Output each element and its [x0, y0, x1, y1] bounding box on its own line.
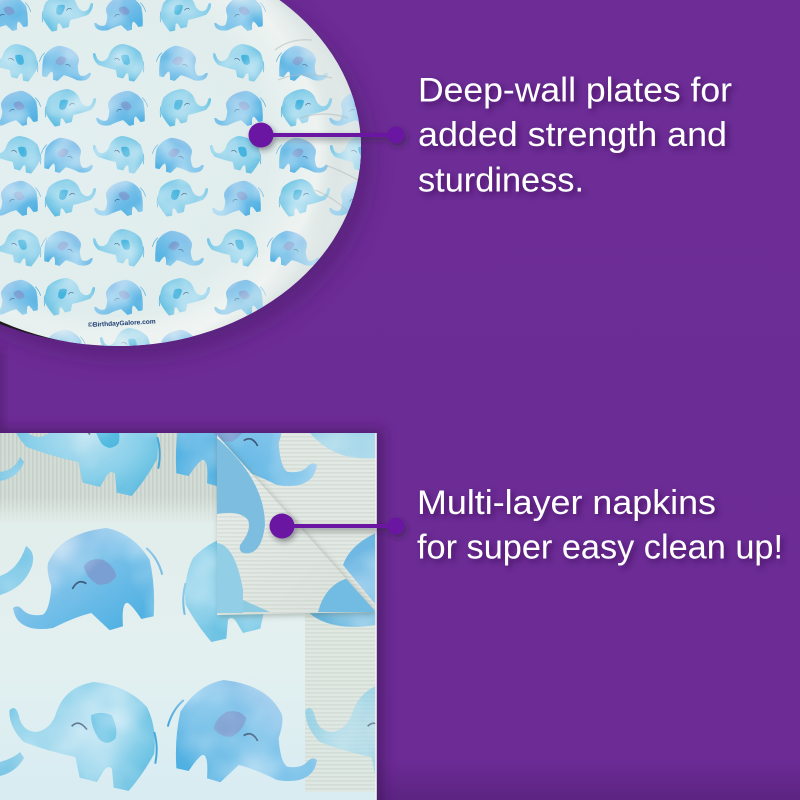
text block: plates — [418, 72, 732, 200]
text block: plates: Deep-wall plates for — [418, 72, 732, 110]
panel: paper plate — [0, 0, 381, 366]
top clipped elephant right — [176, 433, 317, 486]
bottom second elephant — [168, 680, 317, 782]
right napkin edge highlight — [375, 433, 377, 800]
left edge shadow — [0, 350, 4, 435]
plate surface — [0, 0, 361, 346]
top clipped elephant left — [16, 433, 161, 496]
text block: napkins: for super easy clean up! — [417, 528, 783, 566]
plate shadow — [0, 0, 370, 358]
trunk fragment one — [0, 457, 24, 481]
bottom left elephant — [9, 682, 157, 791]
copyright text: ©BirthdayGalore.com — [88, 317, 156, 329]
small dot — [388, 518, 404, 534]
small dot — [388, 126, 404, 144]
napkin ribbed bands — [0, 433, 376, 792]
right middle elephant body — [343, 533, 376, 605]
napkin sheet — [0, 433, 376, 800]
folded corner flap — [217, 435, 376, 615]
trunk fragment three — [0, 752, 24, 776]
napkin elephants — [0, 433, 376, 791]
middle second elephant — [183, 533, 331, 642]
bottom right faded elephant — [305, 686, 376, 778]
plate rim highlight — [0, 0, 350, 335]
panel: napkin — [0, 350, 388, 800]
large dot — [270, 514, 294, 538]
plate underside — [0, 0, 346, 344]
napkin fold shadow — [217, 435, 378, 617]
elephant pattern on plate — [0, 0, 361, 346]
flap printed trunk — [217, 438, 376, 613]
text block: plates: added strength and — [418, 116, 727, 154]
callout: napkins connector — [270, 514, 404, 538]
trunk under flap — [308, 612, 376, 627]
text block: napkins: Multi-layer napkins — [417, 484, 716, 522]
top right fragment — [310, 433, 376, 458]
connector line — [261, 133, 396, 137]
plate rim ripples — [275, 40, 358, 215]
text block: napkins — [417, 484, 783, 566]
trunk fragment two — [0, 546, 33, 595]
plate elephant rows — [0, 0, 361, 346]
connector line — [282, 524, 396, 528]
large dot — [248, 122, 274, 148]
middle large elephant — [13, 528, 162, 630]
text block: plates: sturdiness. — [418, 162, 584, 200]
callout: plates connector — [248, 122, 404, 148]
napkin shadow — [0, 429, 384, 800]
